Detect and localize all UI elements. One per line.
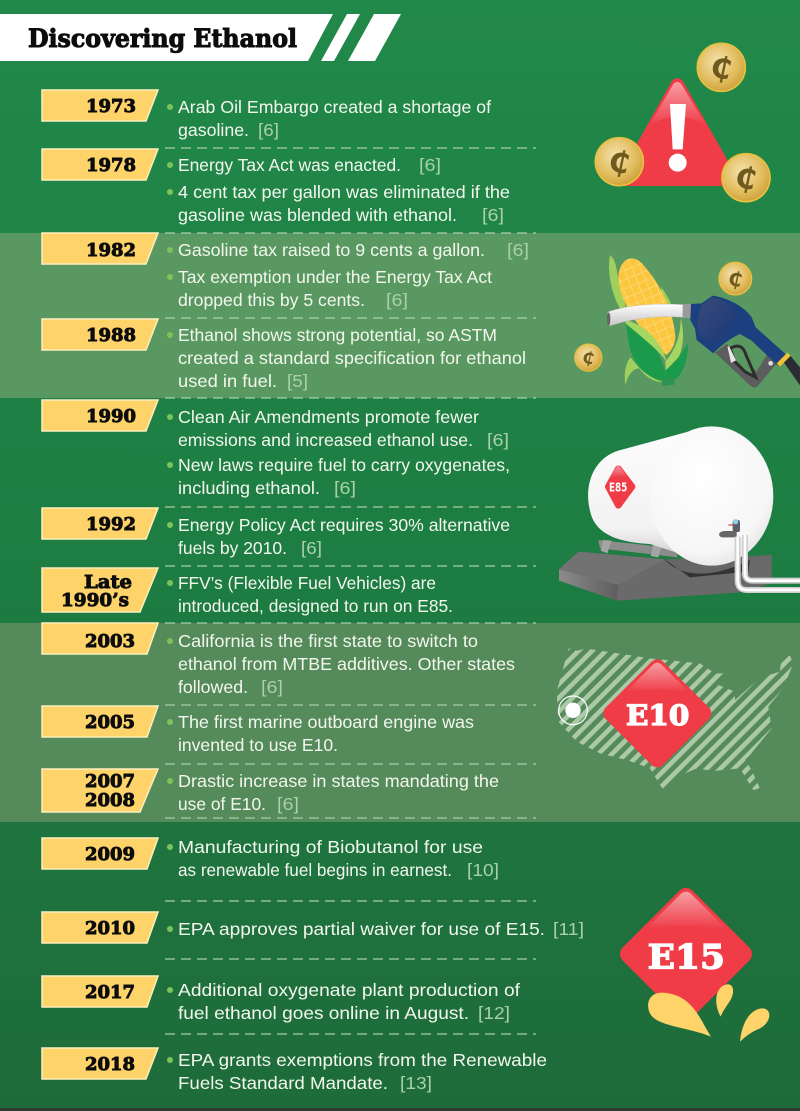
entry: 1978: Energy Tax Act was enacted. xyxy=(178,155,401,175)
entry: 2017 xyxy=(42,976,520,1023)
entry: 1988: Ethanol shows strong potential, so ASTM xyxy=(178,325,497,345)
entry: 1992: [6] xyxy=(301,538,322,558)
entry: 1978: 1978 xyxy=(86,156,136,176)
entry: 2009: 2009 xyxy=(85,845,135,865)
entry: 2007 2008: 2008 xyxy=(85,791,135,811)
entry: 2010: [11] xyxy=(553,919,584,939)
entry: 1990: 1990 xyxy=(86,407,136,427)
entry: 1988: 1988 xyxy=(86,326,136,346)
icon: warning triangle with coins: ₵ xyxy=(707,49,735,88)
entry: 2018: [13] xyxy=(400,1073,432,1093)
entry: 2003: California is the first state to switch to xyxy=(178,631,478,651)
entry: 2007 2008 xyxy=(42,769,499,814)
entry: 1982: [6] xyxy=(507,240,529,260)
entry: 1990: [6] xyxy=(334,478,356,498)
footer strip xyxy=(0,1108,800,1111)
entry: 1982: Gasoline tax raised to 9 cents a gallon. xyxy=(178,240,485,260)
entry: 2017: Additional oxygenate plant production of xyxy=(178,980,520,1000)
badge: E85: E85 xyxy=(609,481,627,495)
entry: 1990: including ethanol. xyxy=(178,478,320,498)
badge text: E15: E15 xyxy=(648,937,725,977)
entry: 1990: New laws require fuel to carry oxygenates, xyxy=(178,455,510,475)
entry: 2007 2008: 2007 xyxy=(85,772,135,792)
entry: 1988 xyxy=(42,319,526,391)
entry: 1973: Arab Oil Embargo created a shortage of xyxy=(178,97,491,117)
icon: E15 diamond with drops xyxy=(629,892,769,1042)
entry: 2017: 2017 xyxy=(85,983,135,1003)
icon: warning triangle with coins xyxy=(595,43,770,202)
badge: E85 xyxy=(608,465,632,505)
entry: 1973 xyxy=(42,90,491,140)
entry: 2003: [6] xyxy=(261,677,283,697)
entry: Late 1990's xyxy=(42,568,453,616)
entry: 1973: [6] xyxy=(258,120,279,140)
entry: Late 1990's: 1990’s xyxy=(61,591,129,611)
icon: corn and fuel nozzle: ₵ xyxy=(726,266,745,292)
entry: 1978 xyxy=(42,149,510,225)
entry: 1990 xyxy=(42,400,510,498)
entry: 1992 xyxy=(42,508,510,558)
entry: 2005 xyxy=(42,706,474,755)
entry: 1982: 1982 xyxy=(86,241,136,261)
entry: 2018 xyxy=(42,1048,547,1093)
entry: 1990: [6] xyxy=(487,430,509,450)
entry: 1978: gasoline was blended with ethanol. xyxy=(178,205,457,225)
entry: 2003: ethanol from MTBE additives. Other states xyxy=(178,654,515,674)
entry: 1978: [6] xyxy=(482,205,504,225)
entry: 2018: Fuels Standard Mandate. xyxy=(178,1073,388,1093)
entry: 1978: [6] xyxy=(419,155,441,175)
entry: 1982: dropped this by 5 cents. xyxy=(178,290,365,310)
entry: 2018: 2018 xyxy=(85,1055,135,1075)
entry: 2003: followed. xyxy=(178,677,248,697)
entry: 2009: Manufacturing of Biobutanol for use xyxy=(178,837,483,857)
separators xyxy=(165,148,536,1034)
entry: 2010: 2010 xyxy=(85,919,135,939)
entry: 1992: fuels by 2010. xyxy=(178,538,287,558)
entry: Late 1990's: introduced, designed to run on E85. xyxy=(178,596,453,616)
entry: 2010: EPA approves partial waiver for use of E15. xyxy=(178,919,545,939)
icon: warning triangle with coins: ₵ xyxy=(732,160,760,198)
entry: Late 1990's: Late xyxy=(84,573,132,593)
entry: 2017: fuel ethanol goes online in August. xyxy=(178,1003,469,1023)
entry: 2009: as renewable fuel begins in earnest. xyxy=(178,860,452,880)
entry: 2007 2008: use of E10. xyxy=(178,794,266,814)
entry: 2010 xyxy=(42,912,584,943)
band: 1982 to 1988 xyxy=(0,233,800,398)
title: Discovering Ethanol xyxy=(28,24,297,53)
entry: 1990: Clean Air Amendments promote fewer xyxy=(178,407,479,427)
entry: 2005: The first marine outboard engine was xyxy=(178,712,474,732)
entry: 2009: [10] xyxy=(467,860,499,880)
entry: 1988: created a standard specification for ethanol xyxy=(178,348,526,368)
entry: 1988: used in fuel. xyxy=(178,371,277,391)
entry: 2007 2008: Drastic increase in states mandating the xyxy=(178,771,499,791)
entry: 1988: [5] xyxy=(287,371,308,391)
icon: corn and fuel nozzle: ₵ xyxy=(581,348,596,369)
icon: E85 storage tank xyxy=(559,426,800,601)
entry: 2007 2008: [6] xyxy=(277,794,299,814)
entry: 1982 xyxy=(42,233,529,310)
entry: 1982: Tax exemption under the Energy Tax Act xyxy=(178,267,492,287)
title banner xyxy=(0,14,401,61)
badge text: E10: E10 xyxy=(626,698,689,732)
entry: 2005: invented to use E10. xyxy=(178,735,338,755)
entry: Late 1990's: FFV’s (Flexible Fuel Vehicles) are xyxy=(178,573,436,593)
entry: 1973: 1973 xyxy=(86,97,136,117)
entry: 2017: [12] xyxy=(478,1003,510,1023)
entry: 2003: 2003 xyxy=(85,632,135,652)
band: 2003 to 2008 xyxy=(0,623,800,822)
entry: 1978: 4 cent tax per gallon was eliminated if the xyxy=(178,182,510,202)
entry: 1992: Energy Policy Act requires 30% alternative xyxy=(178,515,510,535)
entry: 1982: [6] xyxy=(386,290,408,310)
entry: 2003 xyxy=(42,623,515,697)
icon: US map with E10 xyxy=(557,647,793,792)
icon: warning triangle with coins: ₵ xyxy=(605,144,633,182)
icon: corn and fuel nozzle xyxy=(575,255,800,387)
entry: 1992: 1992 xyxy=(86,515,136,535)
entry: 2009 xyxy=(42,837,499,880)
entry: 2018: EPA grants exemptions from the Renewable xyxy=(178,1050,547,1070)
entry: 1990: emissions and increased ethanol use. xyxy=(178,430,473,450)
entry: 1973: gasoline. xyxy=(178,120,249,140)
entry: 2005: 2005 xyxy=(85,713,135,733)
